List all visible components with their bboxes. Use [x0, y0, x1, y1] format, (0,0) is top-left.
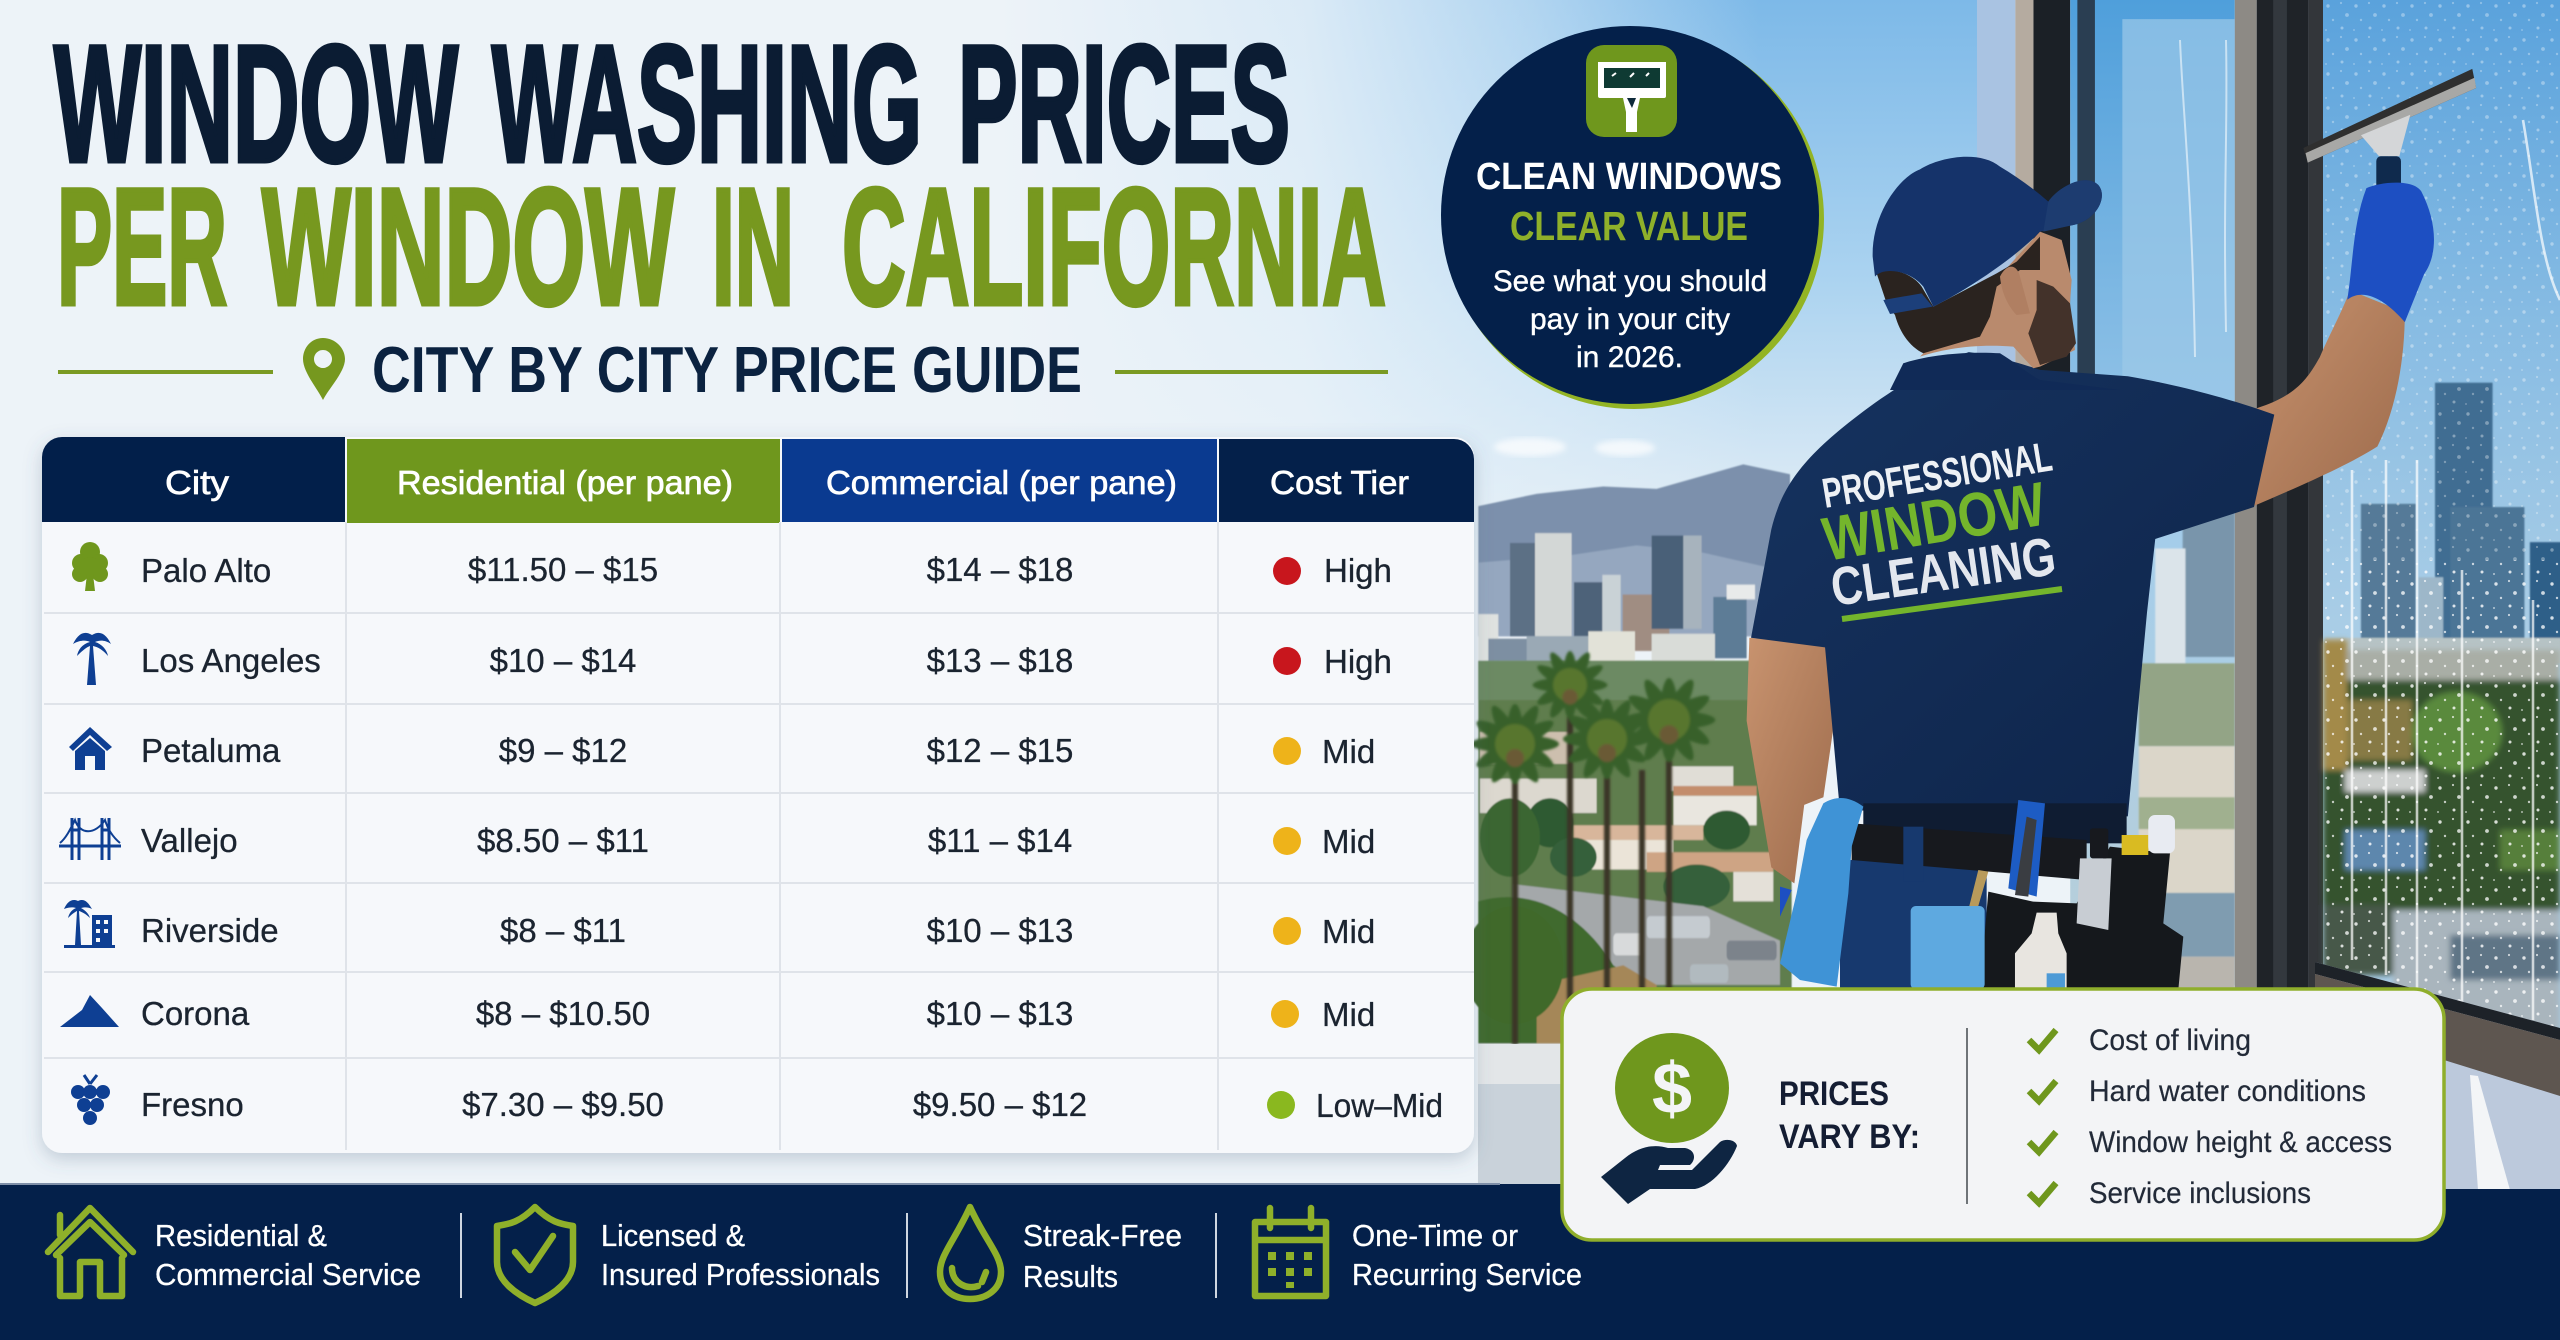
- icon: grapes: [71, 1075, 110, 1125]
- title: [54, 12, 1386, 340]
- palm trees: [1471, 649, 1715, 1044]
- row: Riverside: $8 – $11: [500, 912, 626, 949]
- white bottle: [2015, 913, 2067, 990]
- heading: prices vary by: PRICES: [1779, 1075, 1889, 1113]
- row: Corona: [60, 995, 1375, 1033]
- footer band: [0, 1183, 2560, 1340]
- icon: palm tree: [73, 633, 111, 685]
- factor: hard water: Hard water conditions: [2089, 1075, 2366, 1108]
- right pane with skyline and droplets: [2180, 0, 2560, 1340]
- neck and face: [1920, 232, 2075, 368]
- blue glove: [2347, 183, 2434, 322]
- window frame and glass panes: [1977, 0, 2325, 1084]
- row: Corona: $10 – $13: [927, 995, 1073, 1032]
- pale pillar: [1977, 0, 2015, 638]
- badge: clean windows clear value: [1441, 26, 1824, 409]
- table header: Residential (per pane): [397, 464, 733, 501]
- pane one: [2070, 0, 2235, 1001]
- row: Vallejo: Vallejo: [141, 822, 238, 859]
- towel: [1780, 798, 1863, 987]
- feature: residential and commercial: Commercial Service: [155, 1257, 421, 1292]
- row: Fresno: Low–Mid: [1316, 1087, 1443, 1124]
- polo shirt: [1751, 352, 2274, 816]
- blue tool: [2008, 800, 2045, 897]
- row: Petaluma: $9 – $12: [499, 732, 627, 769]
- icon: squeegee tile: [1586, 45, 1677, 137]
- badge: clean windows clear value: CLEAR VALUE: [1510, 203, 1748, 249]
- row: Los Angeles: $13 – $18: [927, 642, 1073, 679]
- icon: calendar: [1255, 1208, 1326, 1296]
- microfibre sponge: [1911, 906, 1985, 989]
- photo scene: mountains and city: [1463, 464, 1795, 1191]
- shirt logo text: PROFESSIONAL: [1819, 433, 2055, 517]
- ear: [2000, 267, 2030, 315]
- feature: streak-free: [940, 1207, 1182, 1299]
- row: Los Angeles: $10 – $14: [490, 642, 636, 679]
- feature: one-time or recurring: Recurring Service: [1352, 1257, 1582, 1292]
- row: Los Angeles: Los Angeles: [141, 642, 321, 679]
- icon: house outline: [48, 1208, 133, 1296]
- table header: Commercial (per pane): [826, 464, 1177, 501]
- mountains: [1478, 464, 1790, 636]
- price table: [42, 437, 1474, 1153]
- head and cap: [1873, 157, 2120, 390]
- icon: coin in hand: $: [1652, 1049, 1692, 1129]
- feature: streak-free: Streak-Free: [1023, 1218, 1182, 1253]
- squeegee: [2303, 69, 2476, 201]
- cap strap: [1883, 293, 1933, 314]
- row: Vallejo: $8.50 – $11: [477, 822, 649, 859]
- row: Fresno: Fresno: [141, 1086, 244, 1123]
- window cleaner figure: [1747, 69, 2476, 883]
- factor: service inclusions: Service inclusions: [2089, 1177, 2311, 1210]
- factor: cost of living: Cost of living: [2089, 1024, 2251, 1057]
- balcony ledge: [1478, 1044, 1578, 1184]
- row: Petaluma: Mid: [1322, 733, 1375, 770]
- feature: streak-free: Results: [1023, 1259, 1118, 1294]
- row: Palo Alto: [72, 542, 1392, 591]
- icon: shield check: [497, 1207, 573, 1303]
- row: Corona: Mid: [1322, 996, 1375, 1033]
- icon: coin in hand: [1601, 1033, 1737, 1204]
- heading: prices vary by: VARY BY:: [1779, 1118, 1920, 1156]
- row: Palo Alto: Palo Alto: [141, 552, 271, 589]
- yellow nozzle: [2122, 835, 2148, 855]
- factor: cost of living: [2029, 1024, 2251, 1057]
- row: Fresno: $9.50 – $12: [913, 1086, 1087, 1123]
- badge: clean windows clear value: See what you should: [1493, 265, 1767, 298]
- badge: clean windows clear value: pay in your city: [1530, 303, 1730, 336]
- feature: licensed and insured: Insured Professionals: [601, 1257, 880, 1292]
- icon: tree: [72, 542, 108, 591]
- heading: prices vary by: [1779, 1075, 1920, 1156]
- row: Petaluma: $12 – $15: [927, 732, 1073, 769]
- feature: residential and commercial: [48, 1208, 421, 1296]
- subtitle: city by city price guide: [58, 333, 1388, 406]
- title: PER: [57, 155, 227, 340]
- skyline: [1478, 533, 1755, 666]
- table header: [42, 437, 1474, 523]
- hair: [1877, 237, 2040, 353]
- spray can: [2077, 858, 2112, 930]
- row: Palo Alto: $14 – $18: [927, 551, 1073, 588]
- feature: one-time or recurring: One-Time or: [1352, 1218, 1518, 1253]
- row: Los Angeles: [73, 633, 1392, 685]
- title: CALIFORNIA: [842, 155, 1386, 340]
- row: Riverside: Riverside: [141, 912, 279, 949]
- shirt logo text: WINDOW: [1818, 470, 2051, 575]
- neighbourhood: [1478, 661, 1792, 995]
- row: Palo Alto: High: [1324, 552, 1392, 589]
- row: Vallejo: [59, 818, 1375, 860]
- title: WINDOW: [262, 155, 674, 340]
- icon: palm and building: [64, 900, 115, 948]
- table header: Cost Tier: [1270, 464, 1409, 501]
- row: Vallejo: $11 – $14: [928, 822, 1072, 859]
- badge: clean windows clear value: in 2026.: [1576, 341, 1683, 374]
- cap: [1873, 157, 2102, 307]
- feature: residential and commercial: Residential &: [155, 1218, 327, 1253]
- title: WINDOW: [54, 12, 458, 197]
- badge: clean windows clear value: CLEAN WINDOWS: [1476, 156, 1782, 198]
- row: Riverside: [64, 900, 1375, 950]
- white cap: [2148, 815, 2175, 853]
- row: Fresno: [71, 1075, 1443, 1125]
- row: Fresno: $7.30 – $9.50: [462, 1086, 664, 1123]
- row: Vallejo: Mid: [1322, 823, 1375, 860]
- row: Petaluma: [69, 727, 1375, 770]
- feature: licensed and insured: Licensed &: [601, 1218, 745, 1253]
- icon: bridge: [59, 818, 121, 860]
- row: Riverside: Mid: [1322, 913, 1375, 950]
- shirt logo text: CLEANING: [1827, 526, 2059, 618]
- title: WASHING: [492, 12, 922, 197]
- icon: water drop: [940, 1207, 1001, 1299]
- lower sill wedge: [2315, 962, 2560, 1340]
- factor: window height: Window height & access: [2089, 1126, 2392, 1159]
- left arm: [1747, 638, 1837, 883]
- subtitle: city by city price guide: CITY BY CITY PRICE GUIDE: [372, 333, 1082, 406]
- row: Corona: $8 – $10.50: [476, 995, 650, 1032]
- row: Petaluma: Petaluma: [141, 732, 281, 769]
- raised arm: [2251, 290, 2405, 507]
- row: Palo Alto: $11.50 – $15: [468, 551, 658, 588]
- icon: mountain: [60, 995, 119, 1027]
- shirt logo text: [1818, 433, 2062, 619]
- feature: licensed and insured: [497, 1207, 880, 1303]
- pouches: [1980, 847, 2183, 990]
- photo scene: sky: [1000, 0, 2000, 560]
- beard: [2028, 280, 2076, 365]
- row: Corona: Corona: [141, 995, 250, 1032]
- tool belt, jeans and towel: [1780, 798, 2183, 990]
- row: Los Angeles: High: [1324, 643, 1392, 680]
- table header: City: [165, 464, 230, 501]
- title: IN: [712, 155, 794, 340]
- feature: one-time or recurring: [1255, 1208, 1582, 1296]
- panel: prices vary by: [1562, 989, 2444, 1240]
- title: PRICES: [958, 12, 1290, 197]
- gold brush: [1968, 870, 1988, 912]
- icon: house: [69, 727, 112, 770]
- collar: [1890, 353, 2120, 390]
- row: Riverside: $10 – $13: [927, 912, 1073, 949]
